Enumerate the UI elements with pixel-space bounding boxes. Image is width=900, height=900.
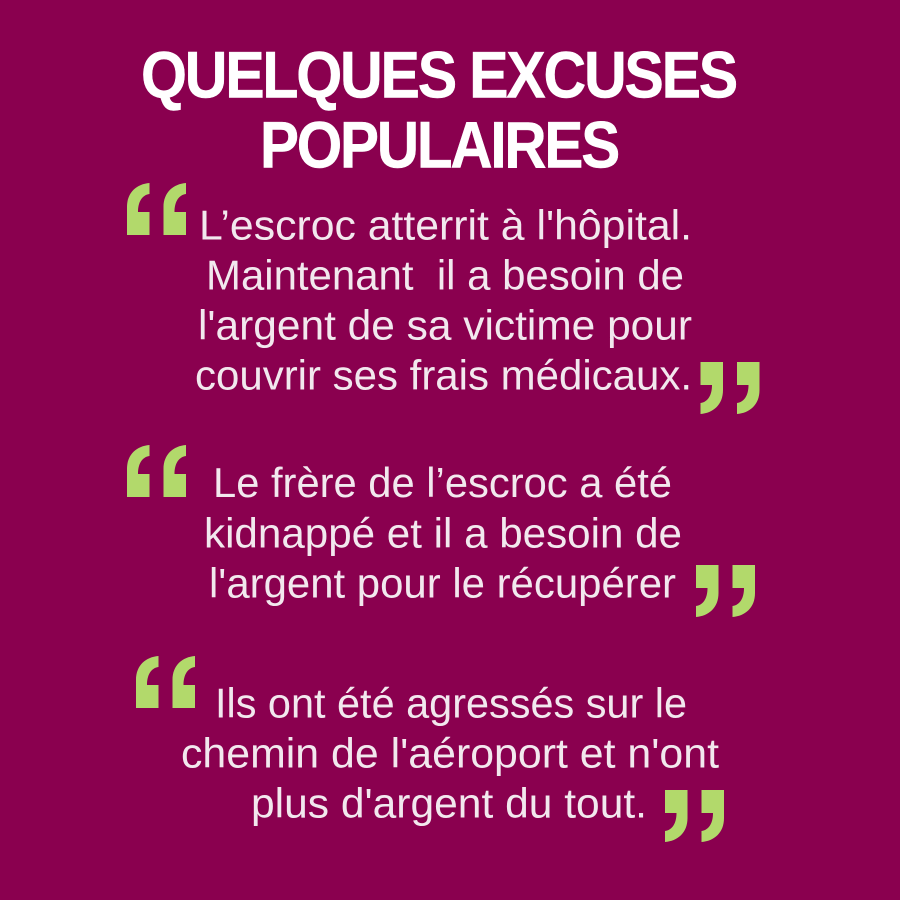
icon: opening quote 2 [127, 445, 186, 497]
text block: excuse 1 [195, 202, 692, 398]
text block: excuse 1: L’escroc atterrit à l'hôpital. [199, 202, 692, 248]
title: QUELQUES EXCUSES [141, 38, 736, 112]
icon: opening quote 3 [136, 656, 195, 708]
title: POPULAIRES [260, 108, 618, 182]
icon: closing quote 3 [665, 790, 724, 842]
icon: closing quote 2 [696, 565, 755, 617]
text block: excuse 2: l'argent pour le récupérer [209, 560, 676, 606]
text block: excuse 2: kidnappé et il a besoin de [204, 510, 682, 556]
text block: excuse 3: plus d'argent du tout. [251, 780, 647, 826]
text block: excuse 3: Ils ont été agressés sur le [215, 680, 687, 726]
icon: closing quote 1 [700, 362, 760, 414]
text block: excuse 3: chemin de l'aéroport et n'ont [181, 730, 719, 776]
text block: excuse 1: Maintenant il a besoin de [206, 252, 684, 298]
text block: excuse 2 [204, 459, 682, 606]
title [141, 38, 736, 182]
text block: excuse 3 [181, 680, 719, 826]
text block: excuse 1: l'argent de sa victime pour [198, 302, 692, 348]
text block: excuse 1: couvrir ses frais médicaux. [195, 352, 692, 398]
text block: excuse 2: Le frère de l’escroc a été [213, 459, 672, 506]
icon: opening quote 1 [127, 183, 186, 235]
